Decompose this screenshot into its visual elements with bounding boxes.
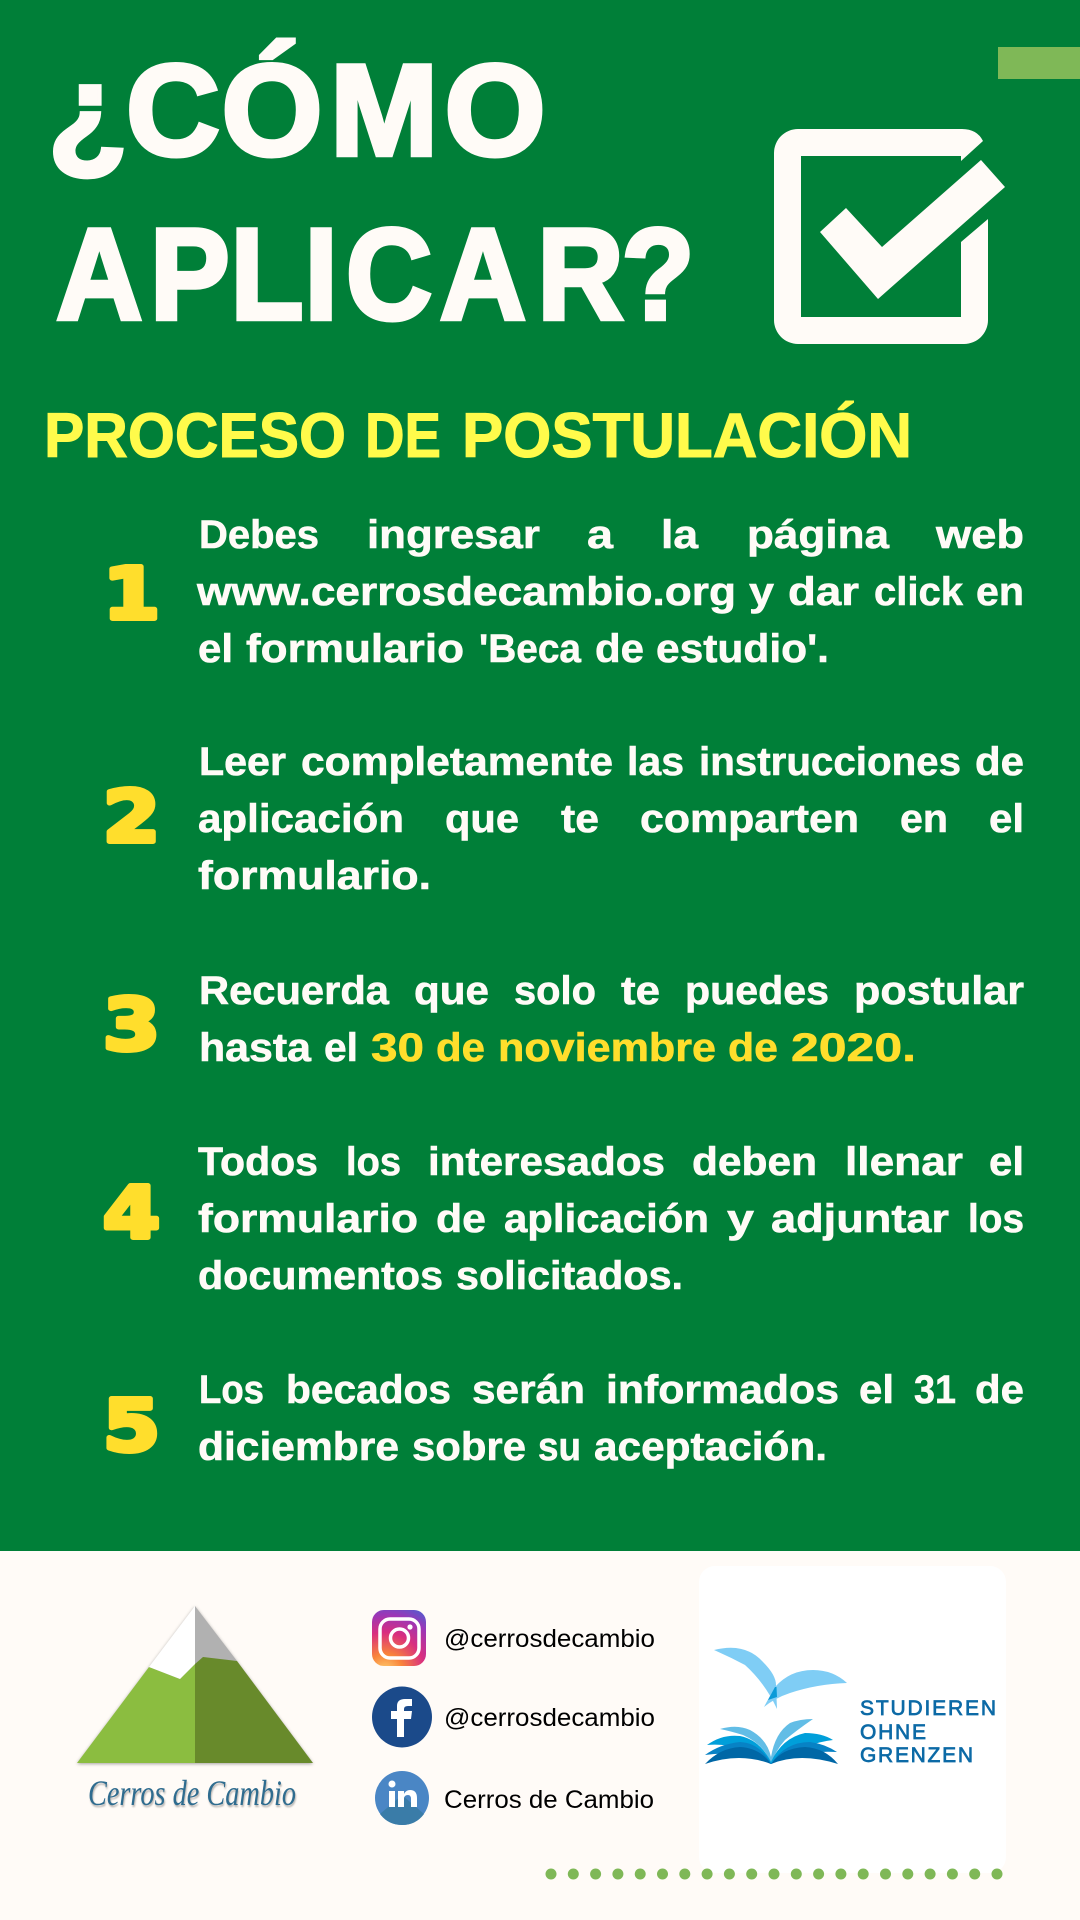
step 5 text: Los (199, 1368, 264, 1412)
step 1 text: a (587, 513, 614, 557)
step 2 text (198, 740, 1024, 898)
step 1 text: y (749, 570, 775, 614)
icon: linkedin (375, 1771, 429, 1825)
decorative accent bar (998, 47, 1080, 79)
title (48, 37, 695, 347)
logo wordmark: STUDIEREN (860, 1697, 996, 1720)
step 4 text: los (968, 1197, 1024, 1241)
step 4 text: documentos (198, 1254, 443, 1298)
logo wordmark: Cerros de Cambio (88, 1773, 296, 1813)
step number 1: 1 (103, 552, 160, 636)
panel: Studieren Ohne Grenzen logo card (699, 1566, 1006, 1873)
step number 4: 4 (103, 1172, 160, 1254)
social: facebook (372, 1686, 655, 1748)
heading: proceso de postulación: POSTULACIÓN (462, 401, 912, 471)
name: Cerros de Cambio (444, 1786, 654, 1814)
logo wordmark: GRENZEN (860, 1744, 973, 1767)
step 1 text: ingresar (367, 513, 540, 557)
step 1 text (196, 513, 1024, 671)
step 5 text: informados (606, 1368, 839, 1412)
step 2 text: el (989, 797, 1024, 841)
step 3 text: 2020. (791, 1026, 916, 1070)
step 5 text: aceptación. (594, 1425, 827, 1469)
step number 2: 2 (103, 776, 160, 858)
icon: open book (705, 1719, 838, 1764)
step 4 text: Todos (198, 1140, 318, 1184)
step 5 text: de (975, 1368, 1024, 1412)
step 3 text: postular (854, 969, 1024, 1013)
handle: @cerrosdecambio (444, 1625, 655, 1653)
step 2 text: comparten (640, 797, 859, 841)
step 1 text: click (874, 570, 964, 614)
step 5 text: diciembre (198, 1425, 399, 1469)
footer panel (0, 1551, 1080, 1920)
step 4 text: aplicación (504, 1197, 709, 1241)
heading: proceso de postulación (44, 401, 912, 471)
step 4 text: los (346, 1140, 401, 1184)
step number 3: 3 (103, 984, 160, 1066)
heading: proceso de postulación: PROCESO (44, 401, 346, 471)
step 2 text: te (561, 797, 599, 841)
title: APLICAR? (56, 202, 695, 347)
step 4 text: solicitados. (456, 1254, 683, 1298)
logo: Cerros de Cambio mountain (77, 1606, 313, 1813)
step 2 text: instrucciones (699, 740, 961, 784)
logo wordmark (860, 1697, 996, 1767)
step 4 text: deben (692, 1140, 817, 1184)
step 4 text: llenar (845, 1140, 963, 1184)
heading: proceso de postulación: DE (365, 401, 441, 471)
icon: checkbox with check mark (774, 129, 1005, 344)
step 3 text: solo (514, 969, 596, 1013)
step 5 text: 31 (914, 1368, 956, 1412)
step 1 text: 'Beca (479, 627, 582, 671)
step 3 text: Recuerda (199, 969, 390, 1013)
handle: @cerrosdecambio (444, 1704, 655, 1732)
step 3 text: que (414, 969, 489, 1013)
step 2 text: completamente (301, 740, 613, 784)
step 3 text: 30 (371, 1026, 424, 1070)
icon: mountain (77, 1606, 313, 1763)
step 3 text: de (728, 1026, 778, 1070)
social: instagram (372, 1610, 655, 1666)
step 3 text: el (324, 1026, 358, 1070)
title: ¿CÓMO (48, 37, 546, 183)
step 3 text (199, 969, 1024, 1070)
step 4 text: de (436, 1197, 486, 1241)
step 4 text: formulario (198, 1197, 418, 1241)
step 5 text: el (859, 1368, 894, 1412)
step 3 text: te (621, 969, 660, 1013)
step 2 text: de (975, 740, 1024, 784)
step 2 text: las (627, 740, 684, 784)
step 4 text (198, 1140, 1024, 1298)
step 4 text: y (727, 1197, 755, 1241)
step 3 text: noviembre (498, 1026, 716, 1070)
step 2 text: Leer (199, 740, 286, 784)
step 1 text: la (661, 513, 699, 557)
step 1 text: estudio'. (656, 627, 829, 671)
step 1 text: en (976, 570, 1024, 614)
step 1 text: formulario (246, 627, 464, 671)
step 1 text: página (747, 513, 890, 557)
icon: instagram (372, 1610, 426, 1666)
step 1 text: de (595, 627, 644, 671)
step 2 text: en (900, 797, 948, 841)
step 1 text: dar (788, 570, 859, 614)
step 3 text: hasta (199, 1026, 312, 1070)
step 5 text: serán (472, 1368, 585, 1412)
step 4 text: el (989, 1140, 1024, 1184)
icon: facebook (372, 1686, 432, 1748)
step 2 text: formulario. (198, 854, 431, 898)
step 5 text: becados (286, 1368, 451, 1412)
step 4 text: adjuntar (771, 1197, 949, 1241)
step 4 text: interesados (428, 1140, 665, 1184)
step 2 text: aplicación (198, 797, 404, 841)
social: linkedin (375, 1771, 654, 1825)
step 3 text: de (436, 1026, 485, 1070)
step 1 text: www.cerrosdecambio.org (196, 570, 736, 614)
step 3 text: puedes (685, 969, 829, 1013)
logo wordmark: OHNE (860, 1721, 926, 1744)
step 2 text: que (445, 797, 519, 841)
step 1 text: web (935, 513, 1024, 557)
step 5 text (198, 1368, 1024, 1469)
step 5 text: su (538, 1425, 581, 1469)
icon: bird (714, 1648, 847, 1709)
step number 5: 5 (103, 1384, 160, 1468)
step 1 text: el (198, 627, 233, 671)
step 5 text: sobre (412, 1425, 526, 1469)
step 1 text: Debes (199, 513, 319, 557)
